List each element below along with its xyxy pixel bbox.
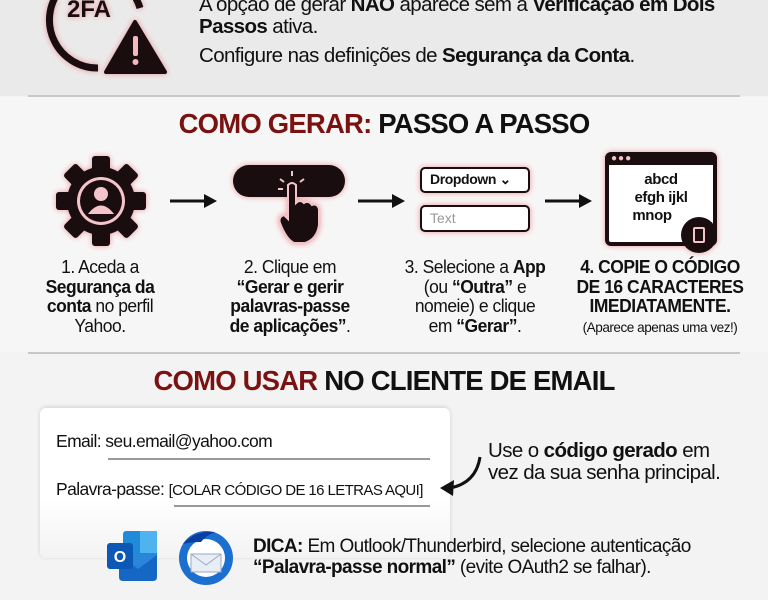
icon: dropdown form: Dropdown ⌄ (430, 171, 511, 187)
caption 4: 4. COPIE O CÓDIGO (580, 257, 740, 277)
caption 1 (46, 257, 155, 336)
caption 4: (Aparece apenas uma vez!) (583, 318, 737, 334)
email client card (40, 408, 450, 558)
caption 1: 1. Aceda a (61, 257, 139, 277)
config text: Configure nas definições de Segurança da Conta. (199, 44, 635, 67)
callout text: Use o código gerado em (488, 439, 709, 462)
tip text: DICA: Em Outlook/Thunderbird, selecione autenticação (253, 536, 691, 557)
heading: como usar: COMO USAR NO CLIENTE DE EMAIL (153, 365, 615, 396)
icon: 2FA shield warning (42, 0, 170, 78)
caption 1: Segurança da (46, 276, 154, 296)
caption 2: 2. Clique em (244, 257, 336, 277)
icon: outlook: O (114, 549, 126, 566)
icon: dropdown form (416, 163, 534, 236)
arrow 3 (545, 194, 592, 208)
icon: code window (605, 152, 717, 246)
tip text: “Palavra-passe normal” (evite OAuth2 se falhar). (253, 556, 651, 578)
top warning band (0, 0, 768, 96)
email field: Email: seu.email@yahoo.com (56, 431, 272, 451)
callout text: vez da sua senha principal. (488, 461, 720, 484)
caption 2: “Gerar e gerir (237, 276, 343, 296)
heading: como gerar: COMO GERAR: PASSO A PASSO (179, 108, 589, 139)
arrow 2 (358, 194, 405, 208)
section: como gerar (0, 97, 768, 352)
warning text (199, 0, 715, 38)
icon: code window: efgh ijkl (634, 189, 688, 206)
warning text: Passos ativa. (199, 15, 318, 38)
caption 3: nomeie) e clique (415, 296, 535, 316)
caption 2: palavras-passe (230, 296, 350, 316)
caption 2 (230, 257, 350, 336)
icon: code window: mnop (632, 207, 672, 224)
icon: dropdown form: Text (430, 210, 456, 226)
icon: click button (230, 161, 348, 248)
caption 3: (ou “Outra” e (424, 276, 526, 296)
arrow 1 (170, 194, 217, 208)
tip text (253, 536, 691, 578)
icon: code window: abcd (644, 171, 678, 188)
icon: outlook (107, 531, 157, 581)
password field: Palavra-passe: [COLAR CÓDIGO DE 16 LETRAS AQUI] (56, 479, 423, 499)
caption 1: Yahoo. (74, 316, 126, 336)
caption 4: IMEDIATAMENTE. (590, 296, 730, 316)
caption 3 (405, 257, 546, 336)
caption 1: conta no perfil (47, 296, 153, 316)
caption 3: em “Gerar”. (429, 316, 521, 336)
icon: thunderbird (179, 531, 233, 585)
caption 3: 3. Selecione a App (405, 257, 545, 277)
icon: gear user (52, 152, 150, 250)
caption 2: de aplicações”. (230, 316, 350, 336)
caption 4 (577, 256, 744, 335)
callout text (488, 439, 720, 484)
caption 4: DE 16 CARACTERES (577, 276, 743, 296)
arrow: curved callout (440, 456, 482, 496)
icon: code window: ●●● (611, 153, 632, 164)
